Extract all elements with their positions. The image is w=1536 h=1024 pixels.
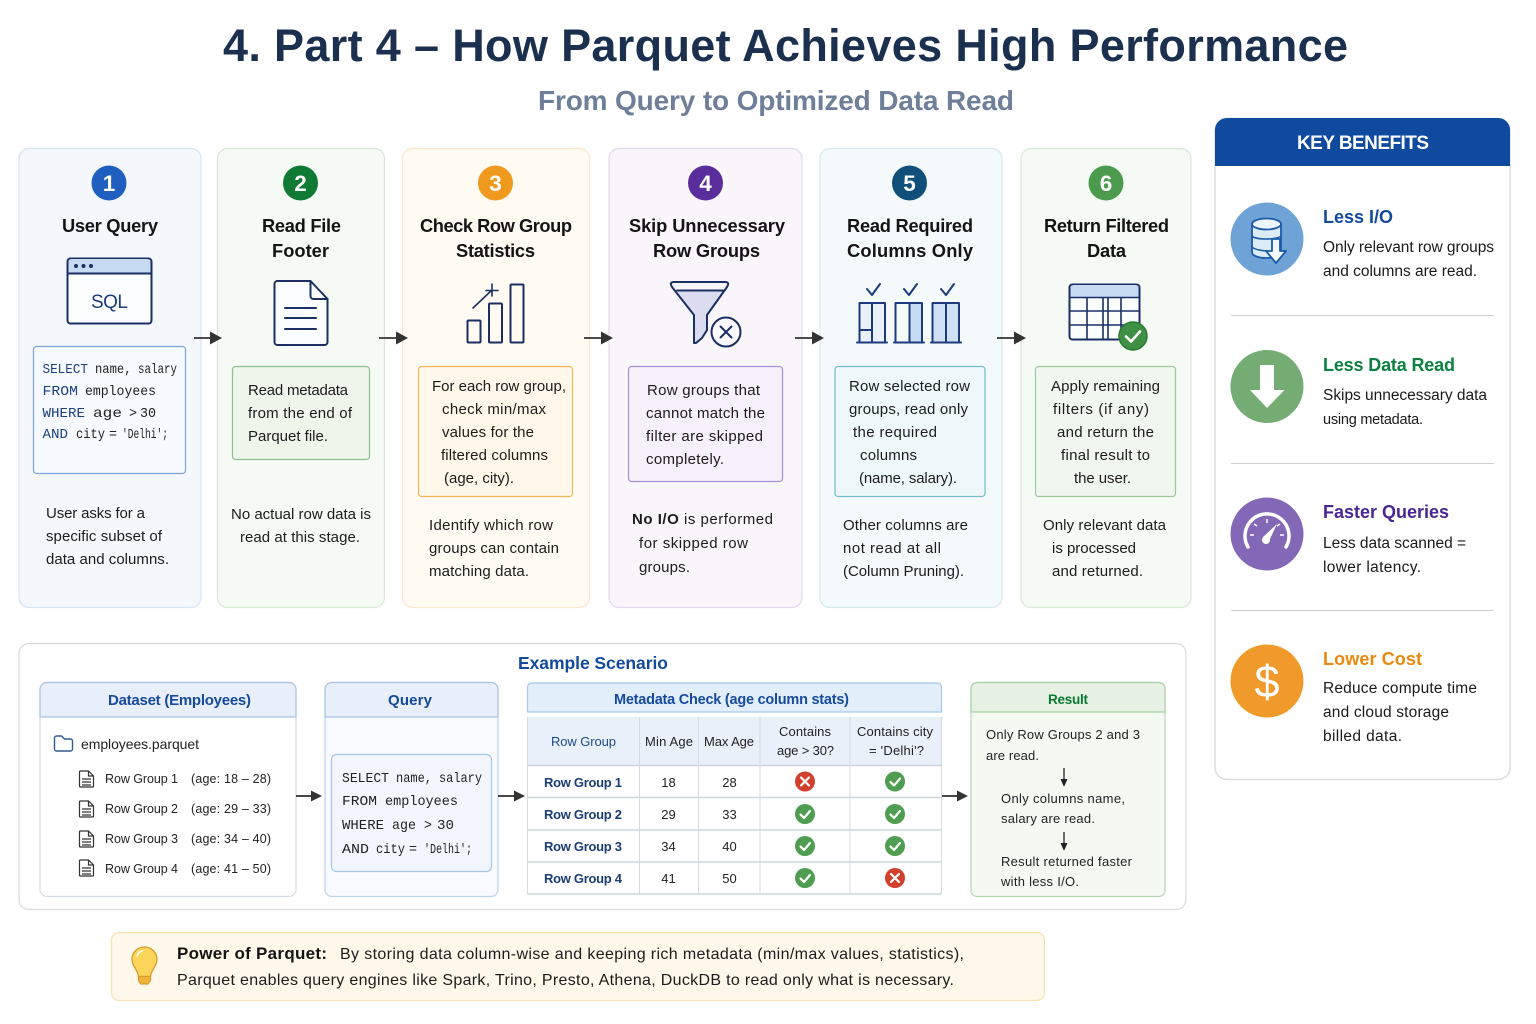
row group list: (age: 29 – 33) (191, 802, 271, 816)
query code: > (424, 818, 432, 834)
metadata check table (528, 683, 942, 894)
metadata check table: Metadata Check (age column stats) (614, 692, 849, 708)
SQL query box: 30 (140, 406, 156, 422)
statistics note box: values for the (442, 424, 534, 441)
icon: table with check (1070, 284, 1147, 350)
result box (971, 682, 1165, 896)
example scenario heading: Example Scenario (518, 653, 668, 673)
panel: step 6 return data (1021, 148, 1191, 608)
table header row: Contains city (857, 724, 934, 739)
row group list: Row Group 2 (105, 802, 178, 816)
step 2 description: No actual row data is (231, 506, 371, 523)
table rows: 33 (722, 807, 737, 822)
columns note box: Row selected row (849, 378, 970, 395)
SQL query box: employees (85, 384, 156, 400)
callout text: By storing data column-wise and keeping rich metadata (min/max values, statistics), (340, 946, 964, 963)
table header row: Min Age (645, 734, 693, 749)
step 4 heading: Skip Unnecessary (629, 215, 786, 236)
step 1 description: data and columns. (46, 551, 169, 568)
table rows: 34 (661, 839, 676, 854)
return note box: the user. (1074, 470, 1131, 487)
table rows: Row Group 1 (544, 775, 622, 790)
arrow: step 2 to 3 (379, 332, 408, 344)
step 3 number: 3 (489, 171, 502, 196)
step 5 description (843, 517, 968, 580)
icon: folder (54, 736, 72, 751)
step 3 heading (420, 215, 572, 261)
arrow: step 3 to 4 (584, 332, 613, 344)
result box: with less I/O. (1000, 874, 1079, 889)
query code: employees (385, 794, 458, 810)
columns note box: groups, read only (849, 401, 968, 418)
table header row: Row Group (551, 734, 616, 749)
query code: = (409, 842, 417, 858)
skip note box: completely. (646, 451, 724, 468)
step 1 number (92, 166, 126, 200)
icon: database download (1230, 202, 1304, 276)
table rows (544, 772, 905, 888)
table rows: 40 (722, 839, 737, 854)
arrow: result step two (1060, 832, 1068, 851)
step 3 description: matching data. (429, 563, 529, 580)
table header row (551, 724, 934, 758)
result box: Only columns name, (1001, 791, 1125, 806)
panel: step 5 read columns (820, 148, 1002, 608)
table rows: 50 (722, 871, 737, 886)
panel: step 1 user query (19, 148, 201, 608)
title: 4. Part 4 – How Parquet Achieves High Performance (223, 20, 1348, 71)
skip note box (628, 366, 782, 482)
table header row: Max Age (704, 734, 754, 749)
arrow: step 4 to 5 (795, 332, 824, 344)
row group list: (age: 34 – 40) (191, 832, 271, 846)
return note box: Apply remaining (1051, 378, 1160, 395)
step 4 number: 4 (699, 171, 712, 196)
row group list: Row Group 1 (105, 772, 178, 786)
step 5 heading: Columns Only (847, 240, 974, 261)
table rows: 29 (661, 807, 676, 822)
benefit: lower cost: billed data. (1323, 728, 1402, 745)
result box: salary are read. (1001, 811, 1095, 826)
step 4 description (632, 511, 773, 576)
result box: Result returned faster (1001, 854, 1133, 869)
step 2 description: read at this stage. (240, 529, 360, 546)
dataset box: employees.parquet (81, 736, 199, 752)
SQL query box: salary (138, 362, 177, 378)
step 5 number: 5 (903, 171, 916, 196)
step 1 description: User asks for a (46, 505, 146, 522)
statistics note box: (age, city). (444, 470, 514, 487)
return note box: filters (if any) (1053, 401, 1149, 418)
query code: 30 (437, 818, 454, 834)
icon: SQL window: SQL (91, 292, 128, 313)
arrow: step 5 to 6 (997, 332, 1026, 344)
panel: key benefits (1215, 118, 1510, 780)
statistics note box: check min/max (442, 401, 546, 418)
benefit: lower cost (1230, 644, 1477, 745)
columns note box: the required (853, 424, 937, 441)
benefit: less I/O: and columns are read. (1323, 263, 1477, 280)
skip note box: cannot match the (646, 405, 765, 422)
step 4 description: for skipped row (639, 535, 748, 552)
SQL query box: AND (42, 427, 68, 443)
row group list: (age: 41 – 50) (191, 862, 271, 876)
icon: document (274, 281, 328, 345)
step 4 description: No I/O is performed (632, 511, 773, 528)
step 4 heading: Row Groups (653, 240, 760, 261)
table rows: 28 (722, 775, 737, 790)
step 1 description: specific subset of (46, 528, 163, 545)
step 1 heading: User Query (62, 215, 159, 236)
SQL query box: age (93, 406, 122, 422)
footer note box: Parquet file. (248, 428, 328, 445)
query box (325, 682, 498, 896)
step 5 heading (847, 215, 974, 261)
step 3 heading: Check Row Group (420, 215, 572, 236)
step 1 number: 1 (103, 171, 115, 196)
query code: city (376, 842, 405, 858)
step 6 number (1088, 166, 1124, 200)
benefit: less I/O: Only relevant row groups (1323, 239, 1494, 256)
panel: step 4 skip row groups (609, 148, 802, 608)
table rows: Row Group 3 (544, 839, 622, 854)
skip note box: filter are skipped (646, 428, 763, 445)
step 5 number (892, 166, 927, 200)
subtitle: From Query to Optimized Data Read (538, 85, 1014, 116)
SQL query box: 'Delhi'; (122, 427, 168, 443)
step 5 description: (Column Pruning). (843, 563, 964, 580)
step 6 heading: Return Filtered (1044, 215, 1169, 236)
skip note box: Row groups that (647, 382, 761, 399)
benefit: less data read: Less Data Read (1323, 355, 1455, 375)
row group list: Row Group 3 (105, 832, 178, 846)
benefit: faster queries: Less data scanned = (1323, 535, 1466, 552)
benefit: lower cost: and cloud storage (1323, 704, 1449, 721)
dataset box: Dataset (Employees) (108, 692, 251, 709)
benefit: less data read: Skips unnecessary data (1323, 387, 1487, 404)
columns note box (835, 366, 985, 496)
footer note box (232, 366, 370, 460)
query code: 'Delhi'; (424, 842, 472, 858)
SQL query box: > (129, 406, 137, 422)
query code: SELECT (342, 771, 389, 787)
step 2 number (283, 166, 318, 200)
columns note box: columns (860, 447, 917, 464)
step 5 description: not read at all (843, 540, 941, 557)
SQL query box (34, 346, 186, 474)
step 5 heading: Read Required (847, 215, 973, 236)
arrow: result step one (1060, 768, 1068, 787)
arrow: metadata to result (942, 790, 968, 802)
benefit: less data read (1230, 350, 1487, 428)
step 1 description (46, 505, 169, 568)
step 6 description: is processed (1052, 540, 1136, 557)
step 6 heading: Data (1087, 240, 1127, 261)
table rows: Row Group 4 (544, 871, 623, 886)
table header row: age > 30? (777, 743, 834, 758)
step 3 description (429, 517, 559, 580)
icon: SQL window (68, 258, 152, 324)
SQL query box: = (109, 427, 117, 443)
panel: step 2 read file footer (218, 148, 384, 608)
table rows: 18 (661, 775, 676, 790)
SQL query box: WHERE (42, 406, 85, 422)
step 3 description: Identify which row (429, 517, 553, 534)
icon: bar chart (468, 284, 524, 342)
benefit: less data read: using metadata. (1323, 412, 1423, 428)
callout text: Power of Parquet: (177, 944, 327, 963)
dataset box (40, 682, 296, 896)
query box: Query (388, 692, 433, 709)
table header row: = 'Delhi'? (869, 743, 924, 758)
query code: FROM (342, 794, 377, 810)
return note box: final result to (1061, 447, 1150, 464)
step 6 number: 6 (1100, 171, 1112, 196)
step 4 heading (629, 215, 786, 261)
callout text: Parquet enables query engines like Spark, Trino, Presto, Athena, DuckDB to read only what is necessary. (177, 972, 954, 989)
return note box (1036, 366, 1176, 496)
step 3 heading: Statistics (456, 240, 535, 261)
table header row: Contains (779, 724, 832, 739)
row group list: (age: 18 – 28) (191, 772, 271, 786)
step 4 description: groups. (639, 559, 690, 576)
step 6 description (1043, 517, 1167, 580)
panel: step 3 check statistics (402, 148, 590, 608)
query code: AND (342, 842, 369, 858)
icon: funnel with cross (671, 282, 740, 346)
benefit: faster queries: Faster Queries (1323, 502, 1449, 522)
statistics note box: For each row group, (432, 378, 566, 395)
key benefits header: KEY BENEFITS (1297, 133, 1429, 154)
step 5 description: Other columns are (843, 517, 968, 534)
step 6 description: Only relevant data (1043, 517, 1167, 534)
table rows: 41 (661, 871, 676, 886)
result box: Only Row Groups 2 and 3 (986, 727, 1140, 742)
step 2 heading (262, 215, 341, 261)
benefit: faster queries: lower latency. (1323, 559, 1421, 576)
benefit: lower cost: Reduce compute time (1323, 680, 1477, 697)
row group list: Row Group 4 (105, 862, 178, 876)
icon: dollar: $ (1254, 656, 1280, 707)
step 3 number (478, 166, 513, 200)
icon: light bulb (132, 947, 157, 984)
step 6 heading (1044, 215, 1169, 261)
arrow: step 1 to 2 (194, 332, 222, 344)
query code: age (392, 818, 416, 834)
step 2 heading: Read File (262, 215, 341, 236)
footer note box: from the end of (248, 405, 353, 422)
callout text (177, 944, 964, 989)
columns note box: (name, salary). (859, 470, 957, 487)
result box: are read. (986, 748, 1039, 763)
row group list (80, 771, 271, 876)
return note box: and return the (1057, 424, 1154, 441)
benefit: faster queries (1230, 498, 1466, 576)
arrow: query to metadata (498, 790, 525, 802)
SQL query box: SELECT (42, 362, 88, 378)
step 2 heading: Footer (272, 240, 329, 261)
benefit: less I/O (1230, 202, 1494, 280)
step 2 number: 2 (294, 171, 307, 196)
icon: down arrow (1230, 350, 1304, 423)
key benefits header (1215, 118, 1510, 166)
table rows: Row Group 2 (544, 807, 622, 822)
step 2 description (231, 506, 371, 546)
query code (332, 754, 492, 872)
statistics note box: filtered columns (441, 447, 548, 464)
step 3 description: groups can contain (429, 540, 559, 557)
query code: salary (439, 771, 482, 787)
result box: Result (1048, 692, 1088, 707)
footer note box: Read metadata (248, 382, 349, 399)
icon: selected columns (857, 284, 961, 342)
icon: speedometer (1230, 498, 1304, 570)
benefit: less I/O: Less I/O (1323, 207, 1393, 227)
SQL query box: FROM (42, 384, 78, 400)
statistics note box (418, 366, 572, 496)
step 6 description: and returned. (1052, 563, 1143, 580)
icon: dollar (1230, 644, 1304, 718)
benefit: lower cost: Lower Cost (1323, 649, 1422, 669)
panel: example scenario (19, 644, 1186, 910)
query code: name, (396, 771, 432, 787)
callout: power of parquet (112, 932, 1044, 1000)
arrow: dataset to query (296, 790, 322, 802)
SQL query box: name, (95, 362, 132, 378)
SQL query box: city (76, 427, 105, 443)
query code: WHERE (342, 818, 384, 834)
step 4 number (688, 166, 723, 200)
